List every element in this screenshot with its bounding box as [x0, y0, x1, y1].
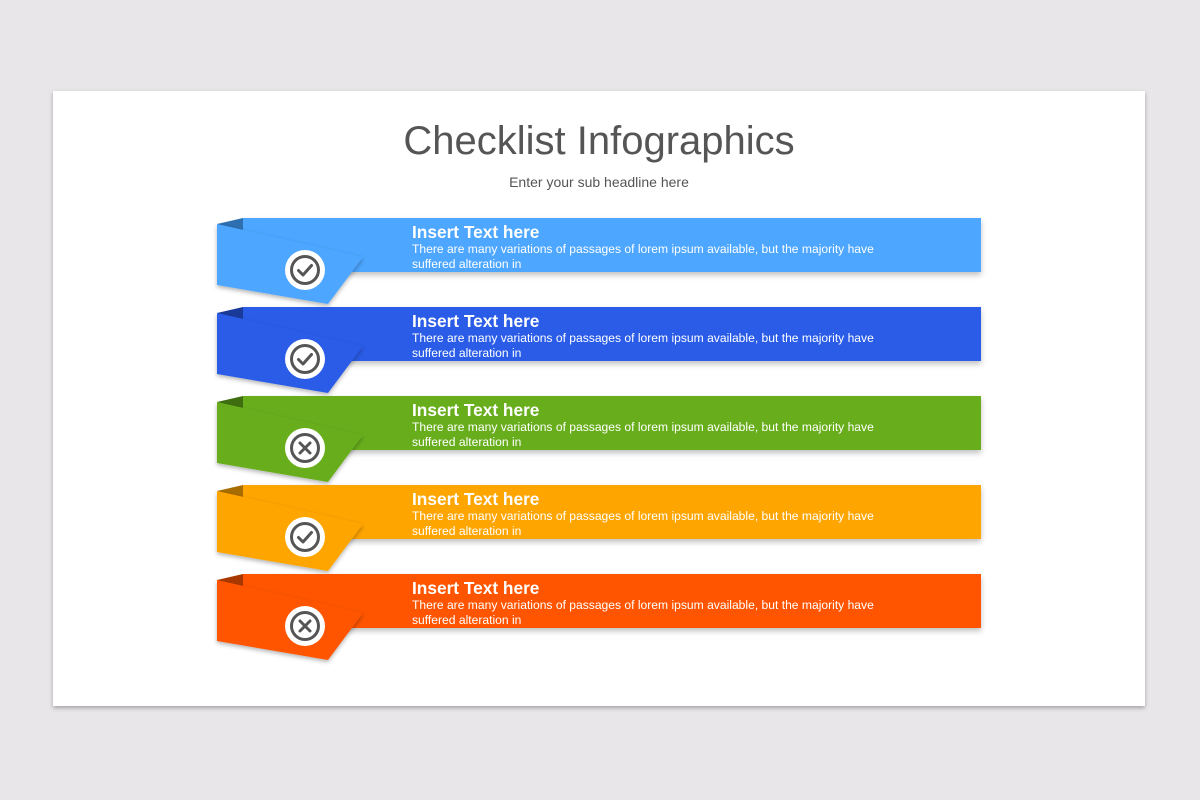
item 1: There are many variations of passages of lorem ipsum available, but the majority have: [412, 242, 874, 256]
item 3: [217, 396, 981, 482]
item 4: There are many variations of passages of lorem ipsum available, but the majority have: [412, 509, 874, 523]
item 1: suffered alteration in: [412, 257, 521, 271]
card panel: [53, 91, 1145, 706]
item 4: Insert Text here: [412, 489, 540, 509]
item 2: [217, 307, 981, 393]
item 1: Insert Text here: [412, 222, 540, 242]
item 2: suffered alteration in: [412, 346, 521, 360]
item 2: Insert Text here: [412, 311, 540, 331]
item 5: [217, 574, 981, 660]
subtitle: Enter your sub headline here: [509, 174, 689, 190]
item 3: There are many variations of passages of lorem ipsum available, but the majority have: [412, 420, 874, 434]
item 5: There are many variations of passages of lorem ipsum available, but the majority have: [412, 598, 874, 612]
item 1: [217, 218, 981, 304]
item 3: suffered alteration in: [412, 435, 521, 449]
item 5: Insert Text here: [412, 578, 540, 598]
item 5: suffered alteration in: [412, 613, 521, 627]
title: Checklist Infographics: [403, 119, 795, 163]
item 2: There are many variations of passages of lorem ipsum available, but the majority have: [412, 331, 874, 345]
item 3: Insert Text here: [412, 400, 540, 420]
item 4: [217, 485, 981, 571]
item 4: suffered alteration in: [412, 524, 521, 538]
